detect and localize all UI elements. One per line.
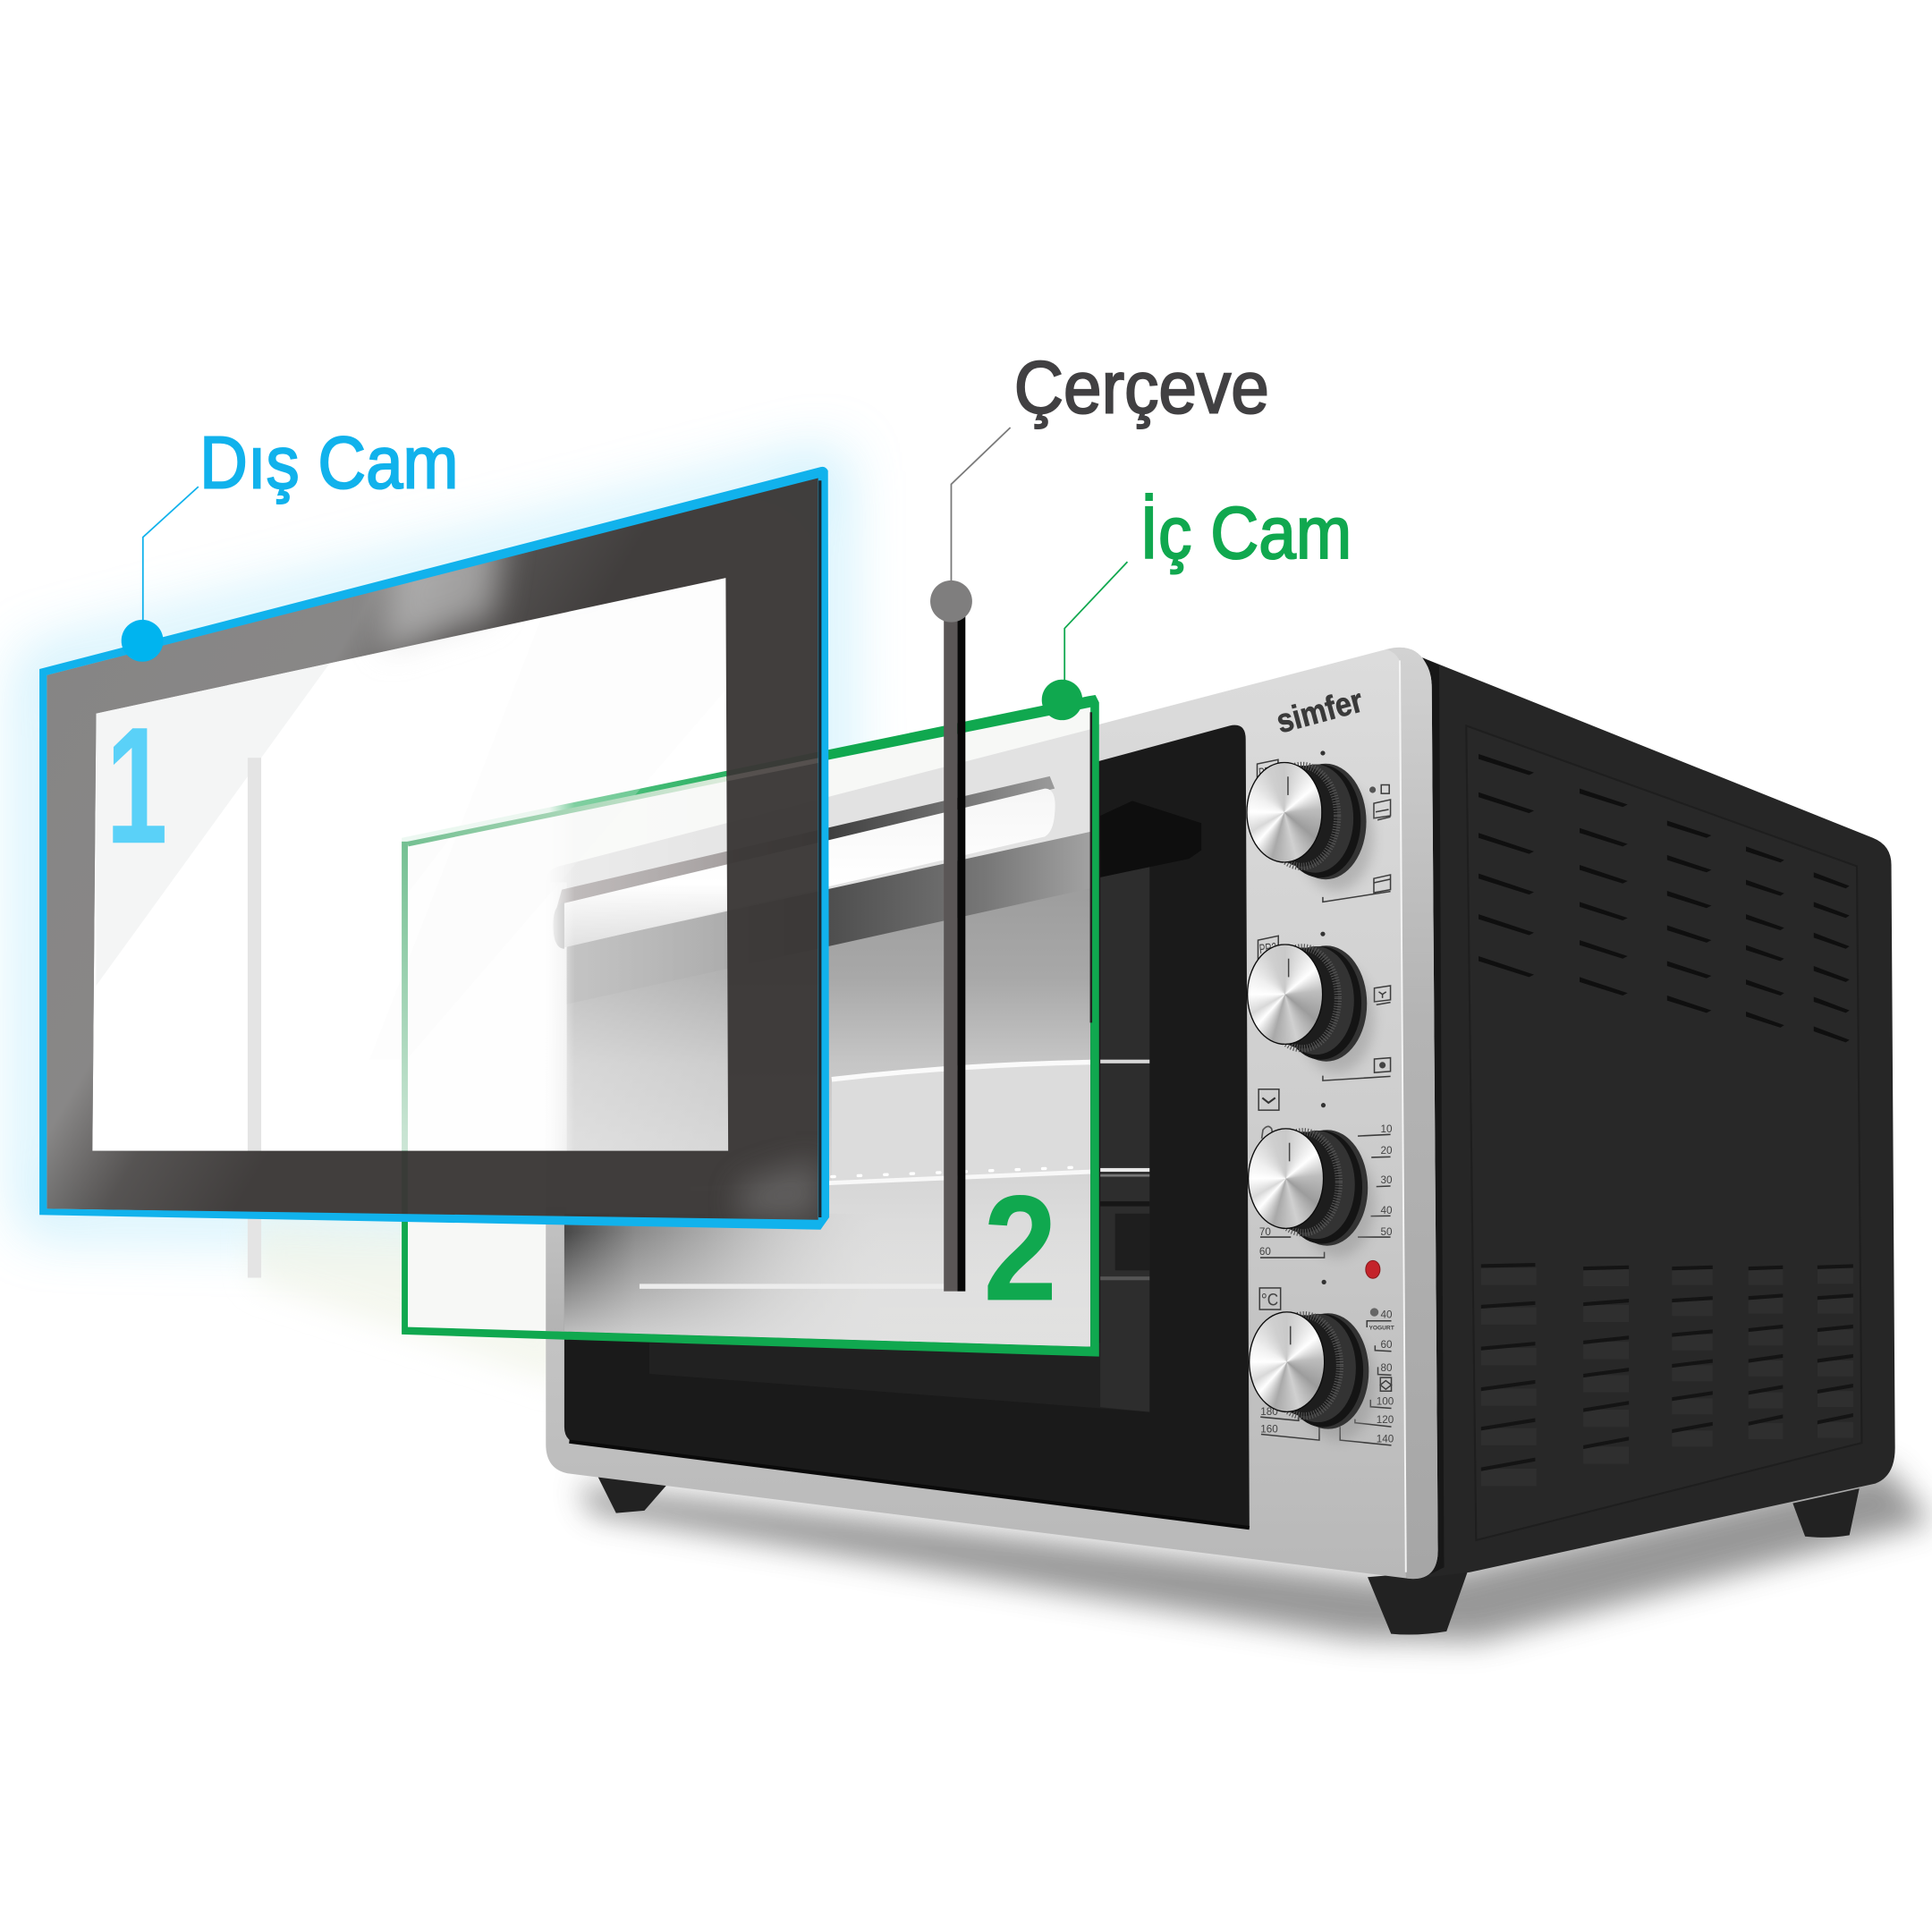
oven handle end [1100,801,1201,877]
oven silver front [546,648,1438,1579]
control panel markings [1258,750,1394,1445]
glow: outer glass [39,470,828,1226]
number 1: 1 [106,693,167,878]
callout: İç Cam: İç Cam [1140,491,1352,574]
ghosted handle [552,776,1055,949]
lower vents [1481,1263,1853,1471]
ghosted oven interior [567,889,1090,1208]
control panel markings: 80 [1381,1362,1393,1374]
knob 4 [1249,1311,1376,1441]
control panel markings: 40 [1381,1205,1393,1216]
knob 3 [1248,1128,1375,1258]
knob 2 [1247,944,1374,1073]
callout: İç Cam [1042,491,1352,720]
number 2: 2 [983,1164,1057,1332]
ghosted baking tray [832,1059,1090,1165]
ghosted oven bezel [562,730,1089,930]
ghosted side strip [546,1224,564,1331]
frame highlights [382,530,819,1220]
inner glass sheen [408,835,453,894]
frame bar [944,616,965,1292]
control panel markings: 120 [1377,1414,1394,1426]
lower door fade [564,1240,812,1338]
control panel markings: 40 [1381,1309,1393,1320]
control panel markings: PR2 [1258,940,1277,957]
frame sheen [47,477,819,1221]
control panel markings: PR1 [1258,764,1276,781]
ghosted dark band under handle [567,832,1090,1004]
lower vent recess [1481,1268,1853,1486]
oven door [564,725,1250,1528]
oven [546,648,1932,1641]
window light sheen [97,664,726,1150]
control panel markings: 60 [1381,1339,1393,1351]
faded frame bar [248,758,261,1278]
control panel markings: 10 [1381,1123,1393,1135]
brand logo: simfer [1272,681,1367,740]
callout: Dış Cam: Dış Cam [199,421,458,504]
ghosted lower door shade [564,1224,816,1336]
control panel markings: 140 [1377,1433,1394,1445]
control panel markings: YOGURT [1368,1325,1394,1331]
control panel markings: 50 [1381,1226,1393,1238]
callout: Dış Cam [122,421,458,662]
ghosted rack [829,1166,1090,1185]
light cone behind glass [252,1220,567,1386]
callout: Çerçeve [930,345,1269,623]
inner glass edge shadow [1090,712,1092,1022]
knob 1 [1246,762,1373,891]
power indicator LED [1366,1260,1380,1278]
upper vents [1479,754,1850,1042]
control panel markings: 160 [1260,1423,1278,1435]
control panel markings: 70 [1259,1226,1271,1238]
control panel markings: 100 [1377,1395,1394,1407]
control panel markings: 60 [1259,1246,1271,1258]
panel: inner glass view [402,690,1109,1361]
oven feet [597,1474,1860,1635]
control panel markings: 30 [1381,1174,1393,1186]
inner glass base [402,690,1104,1361]
control panel markings: 20 [1381,1145,1393,1157]
outer glass side edge [819,480,821,1217]
control panel markings: 180 [1260,1406,1278,1418]
outer glass blue edge [39,467,829,1230]
oven floor shadow [579,1466,1932,1641]
outer glass window [92,578,728,1151]
outer glass dark frame [47,477,819,1221]
oven side panel [1417,656,1895,1577]
panel: outer glass [39,467,829,1278]
callout: Çerçeve: Çerçeve [1014,345,1269,428]
ghosted lower tray [640,1284,963,1288]
control panel markings: °C [1261,1292,1278,1310]
panel: inner glass frame [402,695,1099,1357]
oven window interior [1100,840,1149,1412]
